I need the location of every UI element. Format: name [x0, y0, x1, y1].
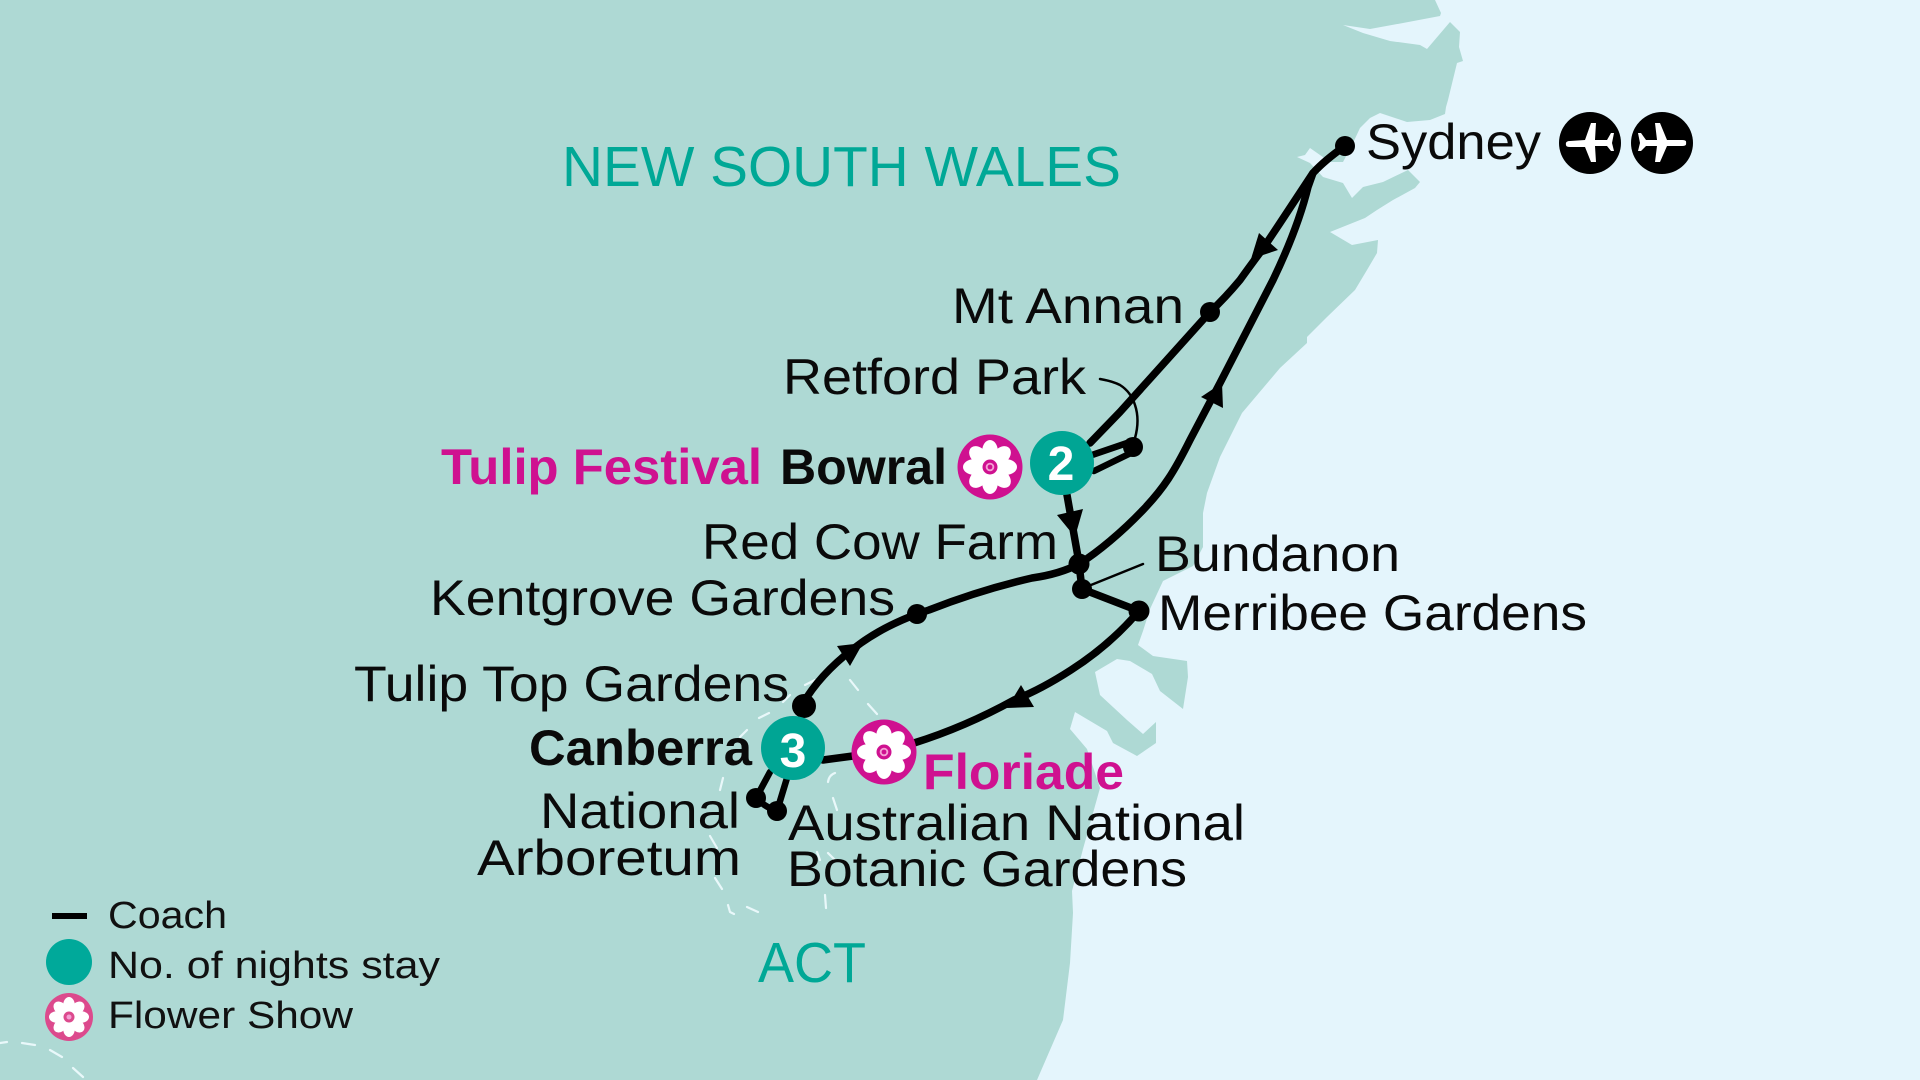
- badge: 3 nights Canberra: 3: [780, 725, 806, 778]
- heading: ACT: ACT: [758, 931, 866, 995]
- label: Australian National Botanic Gardens: [787, 795, 1245, 897]
- label: Australian National Botanic Gardens: Botanic Gardens: [787, 841, 1187, 897]
- label: National Arboretum: [477, 783, 741, 886]
- label: Tulip Festival: Tulip Festival: [441, 439, 762, 495]
- label: Canberra: Canberra: [529, 720, 753, 776]
- label: Retford Park: Retford Park: [783, 349, 1087, 405]
- label: Red Cow Farm: Red Cow Farm: [702, 514, 1058, 570]
- icon: plane departing: [1631, 112, 1693, 174]
- label: Mt Annan: Mt Annan: [952, 278, 1184, 334]
- legend: coach line: Coach: [108, 895, 227, 937]
- land: New South Wales coast: [0, 0, 1463, 1080]
- label: Merribee Gardens: Merribee Gardens: [1158, 585, 1587, 641]
- label: National Arboretum: Arboretum: [477, 830, 741, 886]
- label: Bundanon: Bundanon: [1155, 526, 1400, 582]
- leader lines: Retford Park and Bundanon: [1091, 379, 1143, 585]
- legend: [45, 895, 440, 1041]
- stop markers: [746, 136, 1355, 821]
- label: Tulip Top Gardens: Tulip Top Gardens: [354, 656, 789, 712]
- label: Floriade: Floriade: [923, 744, 1124, 800]
- legend: number of nights: [46, 939, 440, 987]
- heading: New South Wales: NEW SOUTH WALES: [562, 135, 1121, 199]
- label: National Arboretum: National: [540, 783, 740, 839]
- coach route lines: [756, 146, 1345, 811]
- label: Australian National Botanic Gardens: Australian National: [788, 795, 1245, 851]
- legend: coach line: [52, 895, 227, 937]
- icon: plane arriving: [1559, 112, 1621, 174]
- icon: Canberra Floriade flower show: [852, 720, 916, 784]
- legend: number of nights: No. of nights stay: [108, 945, 440, 987]
- badge: 2 nights Bowral: [1030, 431, 1094, 495]
- ACT border and state border dashes: [0, 680, 877, 1077]
- label: Kentgrove Gardens: Kentgrove Gardens: [430, 570, 895, 626]
- badge: 2 nights Bowral: 2: [1048, 438, 1074, 491]
- legend: flower show: Flower Show: [108, 995, 354, 1037]
- label: Sydney: Sydney: [1366, 114, 1541, 170]
- legend: flower show: [45, 993, 354, 1041]
- arrowheads on route: [837, 233, 1278, 708]
- label: Bowral: Bowral: [780, 439, 947, 495]
- icon: Bowral flower show: [958, 434, 1022, 500]
- badge: 3 nights Canberra: [761, 716, 825, 780]
